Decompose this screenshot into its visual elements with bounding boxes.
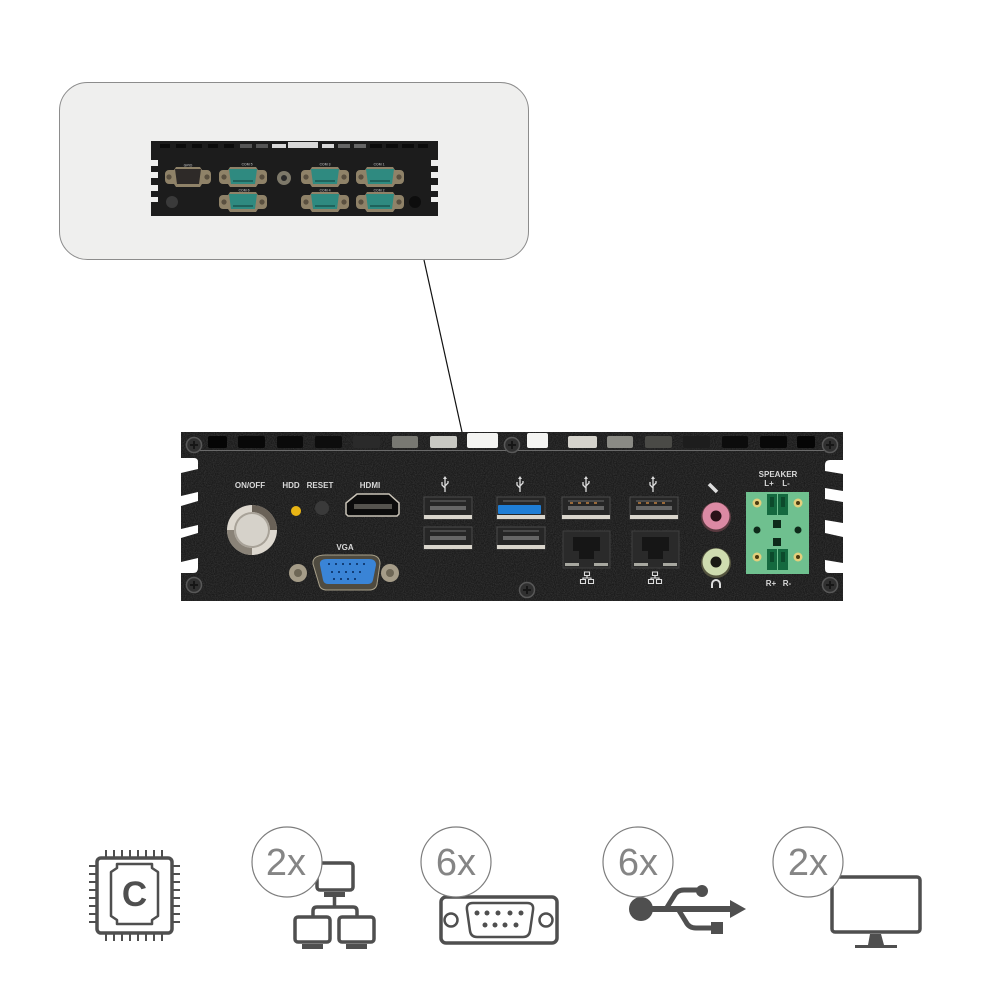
rear port labels: COM 2 <box>373 188 385 192</box>
screws <box>186 438 838 598</box>
port: GPIO <box>165 167 211 187</box>
icon: network 2x <box>252 827 374 949</box>
HDD LED <box>291 506 301 516</box>
front labels: R+ <box>766 579 777 588</box>
HDMI port <box>346 494 399 516</box>
rear port labels: GPIO <box>184 164 193 168</box>
rear port labels: COM 1 <box>373 162 385 166</box>
rear port labels <box>184 162 385 192</box>
rear device photo <box>151 141 438 216</box>
badge: 2x: 2x <box>266 842 306 884</box>
badge: 2x: 2x <box>788 842 828 884</box>
icon: CPU chip <box>89 850 180 941</box>
power button <box>227 505 277 555</box>
VGA port <box>289 555 399 590</box>
audio jacks <box>701 484 731 588</box>
badge: 2x <box>773 827 843 897</box>
front labels <box>235 470 798 588</box>
ports: COM connectors <box>219 167 404 212</box>
LAN ports <box>563 531 679 568</box>
front labels: L+ <box>764 479 774 488</box>
badge: 6x <box>603 827 673 897</box>
badge: 6x: 6x <box>436 842 476 884</box>
USB and LAN symbols <box>442 476 662 584</box>
front labels: HDD <box>282 481 300 490</box>
badge: 6x: 6x <box>618 842 658 884</box>
rear port labels: COM 6 <box>238 188 250 192</box>
front labels: ON/OFF <box>235 481 265 490</box>
jack <box>277 171 291 185</box>
rear port labels: COM 4 <box>319 188 331 192</box>
icon: USB 6x <box>603 827 746 934</box>
main device front <box>181 432 843 601</box>
leader line <box>424 260 462 432</box>
rear port labels: COM 3 <box>319 162 331 166</box>
side heatsink fins <box>181 458 843 573</box>
rubber feet <box>166 196 421 208</box>
reset button <box>315 501 329 515</box>
front labels: HDMI <box>360 481 380 490</box>
icon: serial port 6x <box>421 827 557 943</box>
front labels: SPEAKER <box>759 470 798 479</box>
icon: CPU chip: C <box>122 875 147 914</box>
icon: monitor 2x <box>773 827 920 948</box>
rear port labels: COM 5 <box>241 162 253 166</box>
top heatsink slots <box>199 433 825 451</box>
speaker terminal <box>746 492 809 574</box>
panel: rear I/O detail <box>60 82 528 260</box>
front labels: R- <box>783 579 792 588</box>
front labels: L- <box>782 479 790 488</box>
front labels: RESET <box>307 481 333 490</box>
USB ports <box>424 497 678 549</box>
front labels: VGA <box>336 543 354 552</box>
